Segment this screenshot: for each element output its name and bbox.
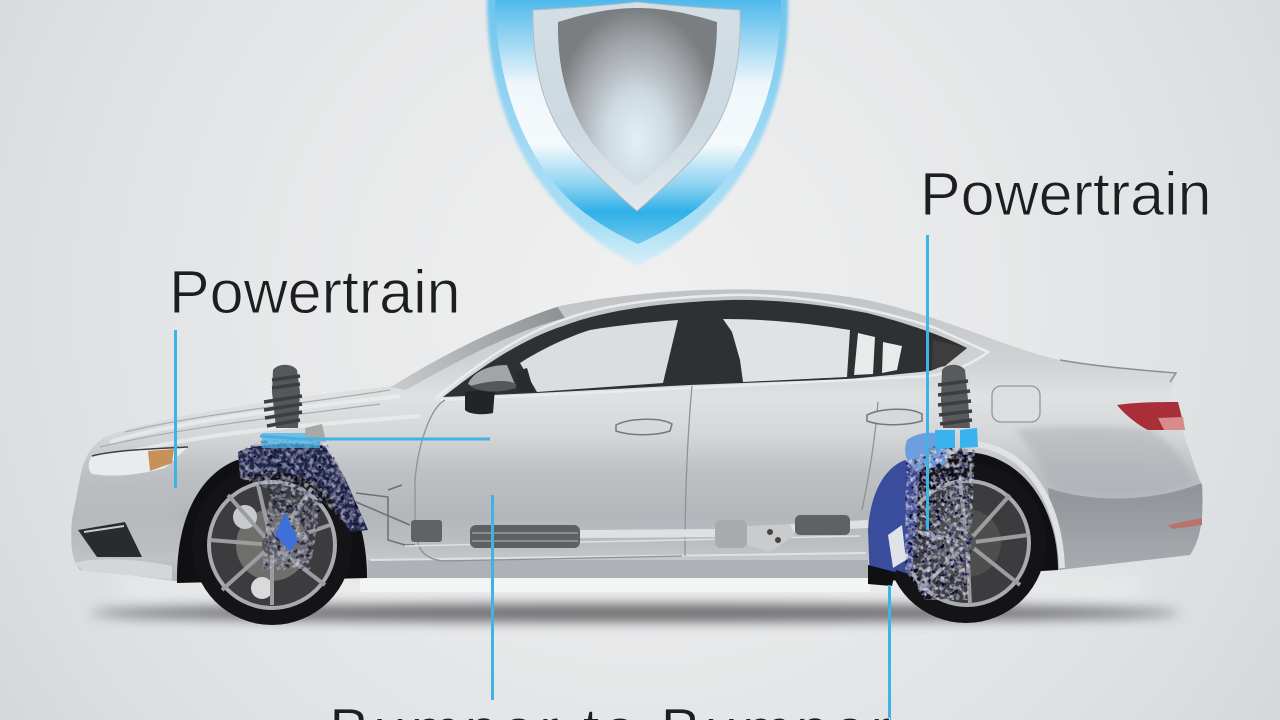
sill lower panel [368,560,868,572]
icon: protective shield [487,0,788,266]
callout line: right powertrain [926,235,929,530]
door handle front [616,419,672,435]
front wheel arch [177,460,367,583]
rear window sliver [932,340,967,369]
door seams [415,386,878,561]
front suspension spring [264,365,302,428]
callout line: front suspension to door [260,436,490,439]
rear wheel arch [870,452,1058,582]
hood shadow line [100,390,390,447]
sill light line [370,553,866,560]
rear window glass [723,319,850,382]
rear reflector [1168,518,1202,529]
car body shell [71,289,1202,581]
rear arch lip [975,444,1062,568]
callout line: left powertrain [174,330,177,488]
front suspension assembly [238,424,368,570]
front window glass [520,320,678,392]
headlight [89,447,188,476]
rear suspension assembly [868,428,980,605]
callout line: bumper to bumper [491,495,494,700]
rear quarter shading [1015,426,1196,496]
fuel door [992,386,1040,422]
floor highlight under car [120,580,1140,594]
callout line: rear underside [888,585,891,720]
floor strip [360,578,870,592]
rear lower bumper [1048,482,1204,575]
wing mirror [465,365,534,414]
spoiler edge [1060,360,1176,382]
door handle rear [867,409,922,425]
tail light [1117,402,1185,430]
side window frame [443,300,967,397]
body shading [72,306,1204,580]
front intake [78,522,142,557]
windshield [390,306,565,390]
label: left powertrain: Powertrain [169,258,461,326]
front wheel [192,465,352,625]
chrome outline [436,295,988,400]
underbody brake lines [356,485,868,552]
ground shadow [90,604,1180,622]
front bumper lip [74,559,172,580]
car [71,289,1204,625]
rear suspension spring [938,365,972,428]
front intake chrome [84,526,124,532]
rear wheel [886,463,1046,623]
rear quarter glass [854,333,902,375]
hood highlights [110,396,420,452]
label: right powertrain: Powertrain [920,160,1212,228]
front fender lower shade [72,480,178,580]
